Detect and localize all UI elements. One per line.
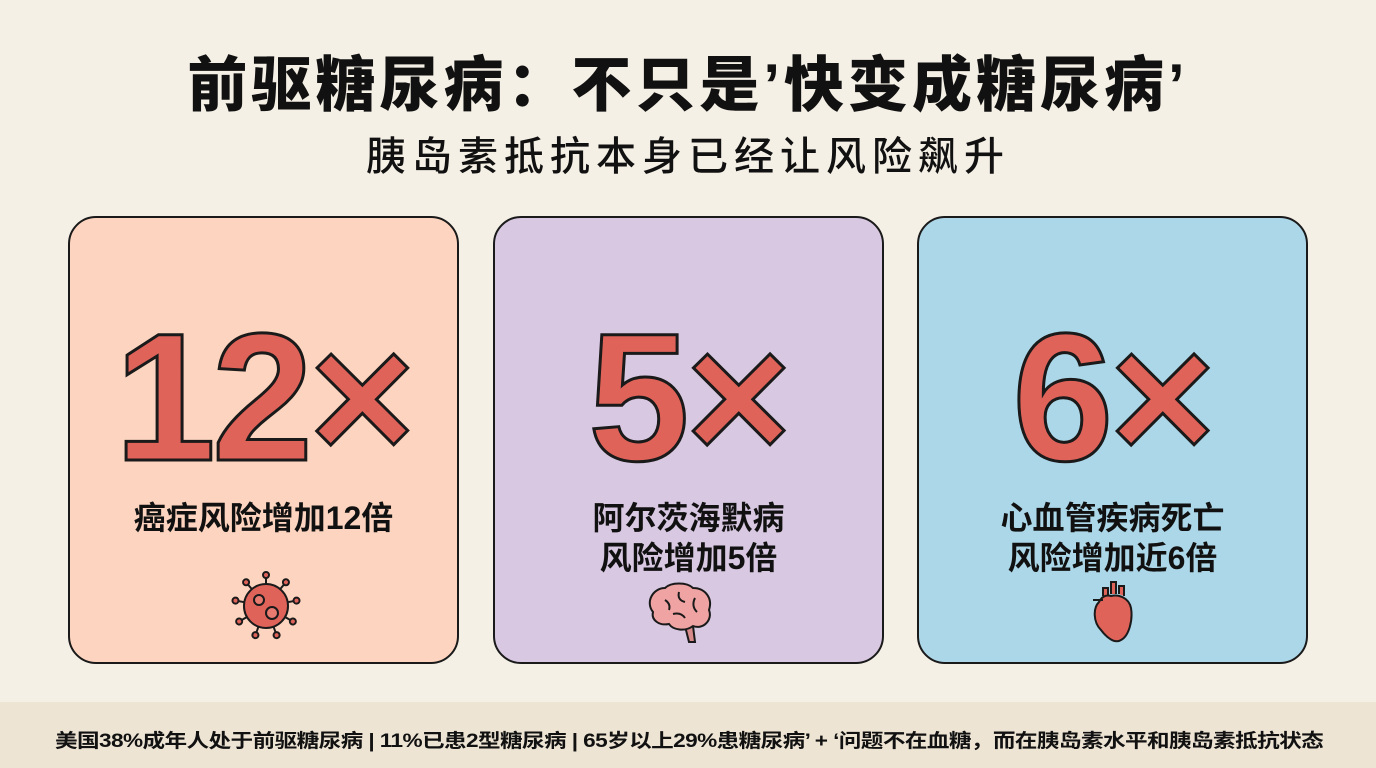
panel: alzheimer xyxy=(493,216,884,664)
footer text: 美国38%成年人处于前驱糖尿病 | 11%已患2型糖尿病 | 65岁以上29%患糖尿病’ + ‘问题不在血糖，而在胰岛素水平和胰岛素抵抗状态 xyxy=(55,731,1323,752)
footer band xyxy=(0,702,1376,768)
label xyxy=(592,500,784,576)
label: 癌症风险增加12倍 xyxy=(134,500,393,536)
label: 阿尔茨海默病 xyxy=(592,500,784,536)
label: 风险增加5倍 xyxy=(600,540,777,576)
label: 风险增加近6倍 xyxy=(1008,540,1217,576)
label: 心血管疾病死亡 xyxy=(1000,500,1224,536)
title: 前驱糖尿病：不只是’快变成糖尿病’ xyxy=(187,52,1189,119)
big number 5x: 5× xyxy=(588,295,788,499)
icon: brain xyxy=(648,582,712,643)
big number 6x: 6× xyxy=(1012,295,1212,499)
icon: virus xyxy=(232,571,300,640)
icon: heart xyxy=(1093,581,1133,642)
label xyxy=(1000,500,1224,576)
panel: cancer xyxy=(68,216,459,664)
panel: cardiovascular xyxy=(917,216,1308,664)
big number 12x: 12× xyxy=(115,295,411,499)
subtitle: 胰岛素抵抗本身已经让风险飙升 xyxy=(366,135,1010,179)
